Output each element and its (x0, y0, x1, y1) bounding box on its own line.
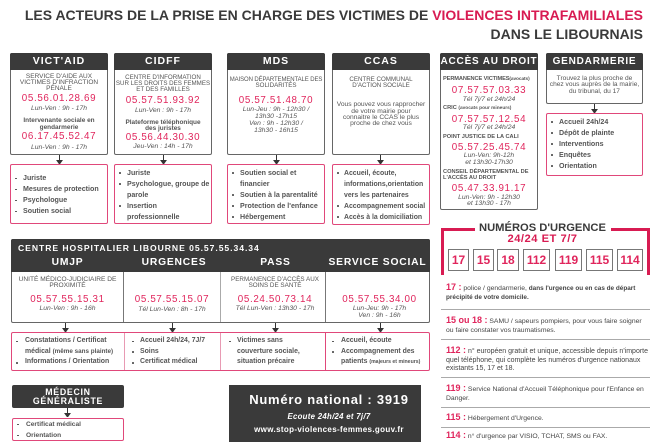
panel: Vict'Aid: PÉNALE (46, 85, 72, 92)
list: Service social services: Accompagnement des (341, 348, 415, 355)
arrow: Service social (377, 323, 384, 332)
column: Urgences (124, 272, 221, 322)
panel: Accès au droit: Tél 7j/7 et 24h/24 (463, 124, 515, 131)
urgency heading: NUMÉROS D'URGENCE (479, 222, 606, 234)
panel: Vict'Aid: Intervenante sociale en (23, 117, 95, 124)
hospital heading: URGENCES (142, 257, 206, 268)
number box 18 (497, 249, 519, 271)
panel: Gendarmerie: du tribunal, du 17 (569, 88, 620, 94)
panel: Vict'Aid: Lun-Ven : 9h - 17h (31, 144, 87, 151)
panel: Médecin généraliste: GÉNÉRALISTE (33, 396, 103, 406)
number box 112: 112 (527, 253, 546, 267)
3919 heading: Numéro national : 3919 (249, 392, 409, 407)
number box 114: 114 (620, 253, 640, 267)
panel: Accès au droit: 07.57.57.12.54 (452, 114, 526, 125)
panel: CIDFF: Plateforme téléphonique (125, 119, 201, 126)
column: PASS: PERMANENCE D'ACCÈS AUX (231, 276, 319, 283)
list: Vict'Aid services: Soutien social (23, 207, 71, 215)
column: UMJP: Lun-Ven : 9h - 16h (39, 305, 96, 312)
list: CCAS services: Accueil, écoute, (344, 170, 396, 176)
list: UMJP services: Constatations / Certificat (25, 337, 107, 344)
panel: Accès au droit: Tél 7j/7 et 24h/24 (463, 96, 515, 103)
column divider: Service social (325, 333, 326, 370)
list: CIDFF services: parole (127, 190, 148, 198)
list: Urgences services (132, 336, 205, 365)
text: 114: 114 : n° d'urgence par VISIO, TCHAT, SMS ou FAX. (446, 430, 607, 440)
panel: CCAS: D'ACTION SOCIALE (352, 82, 410, 89)
number box 115 (586, 249, 613, 271)
list: Gendarmerie services (546, 113, 643, 176)
text: 112: quel téléphone, qui complète les numéros d'urgence nationaux (446, 357, 640, 364)
list: CCAS services: Accompagnement social (344, 202, 425, 210)
bracket right (611, 228, 650, 231)
panel: Accès au droit: Lun-Ven: 9h - 12h30 (458, 194, 520, 201)
panel: CCAS: de votre mairie pour (351, 108, 411, 115)
hospital heading: PASS (260, 257, 291, 268)
list: CIDFF services: Insertion (127, 202, 157, 210)
list: CCAS services (332, 164, 430, 225)
number box 15 (473, 249, 494, 271)
number box 119: 119 (559, 253, 578, 267)
text: 15 ou 18 (446, 315, 642, 334)
text: 17: précipité de votre domicile. (446, 294, 529, 301)
list: Gendarmerie services: Orientation (559, 162, 597, 170)
text: 119 (446, 383, 644, 402)
number box 112 (523, 249, 550, 271)
bracket right side (647, 228, 650, 275)
panel: Accès au droit: ACCÈS AU DROIT (441, 56, 537, 67)
panel: CIDFF (114, 53, 212, 155)
panel: CIDFF: Jeu-Ven : 14h - 17h (133, 143, 193, 150)
list: UMJP services: médical (même sans plainte) (25, 348, 113, 355)
panel: CCAS: Vous pouvez vous rapprocher (337, 101, 425, 108)
hours: Ecoute 24h/24 et 7j/7 (287, 412, 370, 421)
text: 15 ou 18: ou faire constater vos traumatismes. (446, 327, 556, 334)
list: Service social services: patients (majeurs et mineurs) (341, 358, 420, 365)
column: Urgences: 05.57.55.15.07 (135, 294, 209, 305)
column divider: PASS (220, 333, 221, 370)
panel: MDS: Lun-Jeu : 9h - 12h30 / (243, 106, 309, 113)
panel: CIDFF: 05.56.44.30.30 (126, 132, 200, 143)
panel: Centre hospitalier Libourne (11, 239, 430, 323)
panel: CIDFF: CENTRE D'INFORMATION (125, 74, 201, 81)
list: Vict'Aid services: Juriste (23, 174, 46, 182)
number box 15: 15 (477, 253, 490, 267)
arrow: Vict'Aid (56, 155, 63, 164)
panel: numéro national 3919 (229, 385, 421, 442)
text: 119: Danger. (446, 395, 470, 402)
column: UMJP: UNITÉ MÉDICO-JUDICIAIRE DE (19, 276, 116, 283)
text: 112 (446, 345, 648, 372)
arrow: CCAS (377, 155, 384, 164)
list: MDS services: financier (240, 180, 270, 188)
list: Service social services (332, 336, 420, 365)
text: 17 (446, 282, 636, 301)
panel: Vict'Aid: 05.56.01.28.69 (22, 93, 96, 104)
column: UMJP: 05.57.55.15.31 (30, 294, 105, 305)
column: PASS (221, 272, 326, 322)
title (25, 7, 643, 42)
list: MDS services (227, 164, 325, 224)
panel: Vict'Aid: VICTIMES D'INFRACTION (20, 79, 98, 86)
hospital heading: CENTRE HOSPITALIER LIBOURNE 05.57.55.34.34 (18, 243, 260, 253)
list: Urgences services: Certificat médical (140, 358, 197, 365)
text: 15 ou 18: 15 ou 18 : SAMU / sapeurs pompiers, pour vous faire soigner (446, 315, 642, 325)
list: Urgences services: Accueil 24h/24, 7J/7 (140, 337, 205, 344)
panel: CCAS: CENTRE COMMUNAL (349, 76, 413, 83)
arrow: Urgences (169, 323, 176, 332)
panel: Vict'Aid: 06.17.45.52.47 (22, 131, 96, 142)
list: Urgences services: Soins (140, 348, 159, 355)
list: PASS services (229, 336, 300, 365)
panel: numéros d'urgence (441, 221, 650, 275)
text: 112: existants 15, 17 et 18. (446, 365, 514, 372)
arrow: UMJP (62, 323, 69, 332)
panel: CIDFF: ET DES FAMILLES (136, 86, 190, 93)
list: CCAS services: Accès à la domiciliation (344, 214, 422, 220)
arrow: CIDFF (160, 155, 167, 164)
list: CCAS services: informations,orientation (344, 180, 423, 188)
panel: Accès au droit: 05.57.25.45.74 (452, 142, 526, 153)
panel: Gendarmerie: GENDARMERIE (553, 56, 636, 67)
panel: CIDFF: SUR LES DROITS DES FEMMES (116, 80, 210, 87)
panel: MDS: 13h30 - 16h15 (254, 127, 298, 134)
panel: Accès au droit: CONSEIL DÉPARTEMENTAL DE (443, 169, 528, 175)
column divider: Urgences (124, 333, 125, 370)
text: 119: 119 : Service National d'Accueil Téléphonique pour l'Enfance en (446, 383, 644, 393)
bracket left (441, 228, 475, 231)
number box 17 (448, 249, 469, 271)
column: Service social: 05.57.55.34.00 (342, 294, 417, 305)
panel: CCAS: CCAS (364, 55, 398, 67)
panel: Accès au droit (440, 53, 538, 210)
list: UMJP services: Informations / Orientation (25, 358, 109, 365)
list: Médecin services: Orientation (26, 432, 61, 439)
column: Urgences: Tél Lun-Ven : 8h - 17h (138, 306, 206, 313)
panel: Gendarmerie: Trouvez la plus proche de (557, 75, 632, 82)
panel: CCAS (332, 53, 430, 155)
panel: MDS (227, 53, 325, 155)
panel: Accès au droit: et 13h30 - 17h (467, 200, 511, 207)
panel: Accès au droit: L'ACCÈS AU DROIT (443, 175, 496, 181)
panel: Accès au droit: CRIC (avocats pour mineurs) (443, 105, 511, 111)
panel: Accès au droit: et 13h30-17h30 (465, 159, 513, 166)
list: Médecin services (12, 418, 124, 441)
panel: MDS: SOLIDARITÉS (256, 82, 296, 89)
panel: CIDFF: CIDFF (145, 55, 181, 67)
list: Gendarmerie services: Enquêtes (559, 150, 591, 158)
panel: CCAS: connaitre le CCAS le plus (343, 114, 419, 121)
list: Gendarmerie services: Accueil 24h/24 (559, 118, 608, 126)
text: 17: 17 : police / gendarmerie, dans l'urgence ou en cas de départ (446, 282, 635, 292)
panel: MDS: MDS (263, 55, 289, 67)
panel: CCAS: proche de chez vous (350, 120, 412, 127)
hospital heading: UMJP (52, 257, 83, 268)
column: Service social (342, 294, 417, 319)
list: Gendarmerie services: Dépôt de plainte (559, 128, 614, 136)
panel: CIDFF: des juristes (145, 125, 181, 132)
panel: Gendarmerie: chez vous auprès de la mairie, (550, 81, 639, 88)
column: Service social: Ven : 9h - 16h (358, 312, 401, 319)
panel: Médecin généraliste (12, 385, 124, 408)
list: CIDFF services: Psychologue, groupe de (127, 180, 209, 188)
panel: CIDFF: Lun-Ven : 9h - 17h (135, 107, 191, 114)
list: hospital services (11, 332, 430, 371)
panel: Accès au droit: Lun-Ven: 9h-12h (464, 152, 514, 159)
list: Gendarmerie services: Interventions (559, 140, 604, 148)
list: UMJP services (16, 336, 113, 365)
panel: Accès au droit: POINT JUSTICE DE LA CALI (443, 134, 519, 140)
panel: CIDFF: 05.57.51.93.92 (126, 95, 200, 106)
column: PASS: Tél Lun-Ven : 13h30 - 17h (236, 305, 314, 312)
panel: MDS: 05.57.51.48.70 (239, 95, 313, 106)
list: CCAS services: vers les partenaires (344, 192, 409, 198)
column: Service social: Lun-Jeu: 9h - 17h (353, 305, 406, 312)
column: PASS: SOINS DE SANTÉ (249, 282, 301, 289)
list: Vict'Aid services: Mesures de protection (23, 185, 99, 193)
number box 18: 18 (501, 253, 515, 267)
website: www.stop-violences-femmes.gouv.fr (254, 425, 404, 434)
list: CIDFF services (114, 164, 212, 224)
list: PASS services: Victimes sans (237, 337, 283, 344)
number box 115: 115 (590, 253, 609, 267)
panel: Accès au droit: 07.57.57.03.33 (452, 85, 526, 96)
list: MDS services: Soutien social et (240, 168, 296, 176)
number box 114 (617, 249, 643, 271)
column: UMJP: PROXIMITÉ (49, 282, 86, 289)
panel: Médecin généraliste: MÉDECIN (45, 386, 91, 396)
list: Vict'Aid services (10, 164, 108, 224)
urgency subheading: 24/24 ET 7/7 (507, 233, 578, 245)
arrow: Gendarmerie (591, 104, 598, 113)
list: MDS services: Protection de l'enfance (240, 202, 318, 210)
panel: Accès au droit: PERMANENCE VICTIMES(avocats) (443, 76, 530, 82)
hospital heading (11, 239, 430, 272)
panel: Accès au droit: 05.47.33.91.17 (452, 183, 526, 194)
column: PASS: 05.24.50.73.14 (238, 294, 312, 305)
title: DANS LE LIBOURNAIS (491, 26, 643, 42)
panel: Vict'Aid: VICT'AID (33, 55, 85, 67)
panel: Vict'Aid (10, 53, 108, 155)
list: Vict'Aid services: Psychologue (23, 196, 67, 204)
column: UMJP (12, 272, 124, 322)
panel: Gendarmerie (546, 53, 643, 104)
list: MDS services: Hébergement (240, 212, 285, 220)
arrow: PASS (272, 323, 279, 332)
panel: MDS: MAISON DÉPARTEMENTALE DES (230, 77, 322, 83)
list: Service social services: Accueil, écoute (341, 337, 392, 344)
panel: Vict'Aid: Lun-Ven : 9h - 17h (31, 105, 87, 112)
text: 112: 112 : n° européen gratuit et unique, accessible depuis n'importe (446, 345, 648, 355)
list: MDS services: Soutien à la parentalité (240, 190, 318, 198)
list: Médecin services: Certificat médical (26, 421, 81, 428)
list: CIDFF services: Juriste (127, 168, 150, 176)
list: PASS services: situation précaire (237, 358, 294, 365)
list: PASS services: couverture sociale, (237, 348, 300, 355)
list: CIDFF services: professionnelle (127, 212, 179, 220)
text: 115: 115 : Hébergement d'Urgence. (446, 412, 544, 422)
arrow: MDS (273, 155, 280, 164)
title: LES ACTEURS DE LA PRISE EN CHARGE DES VICTIMES DE VIOLENCES INTRAFAMILIALES (25, 7, 643, 23)
number box 119 (555, 249, 582, 271)
panel: Vict'Aid: SERVICE D'AIDE AUX (26, 73, 92, 80)
hospital heading: SERVICE SOCIAL (328, 257, 426, 268)
panel: Vict'Aid: gendarmerie (40, 124, 78, 131)
panel: MDS: Ven : 9h - 12h30 / (249, 120, 303, 127)
panel: MDS: 13h30 -17h15 (255, 113, 297, 120)
number box 17: 17 (452, 253, 465, 267)
bracket left side (441, 228, 444, 275)
arrow: Médecin (64, 408, 71, 417)
